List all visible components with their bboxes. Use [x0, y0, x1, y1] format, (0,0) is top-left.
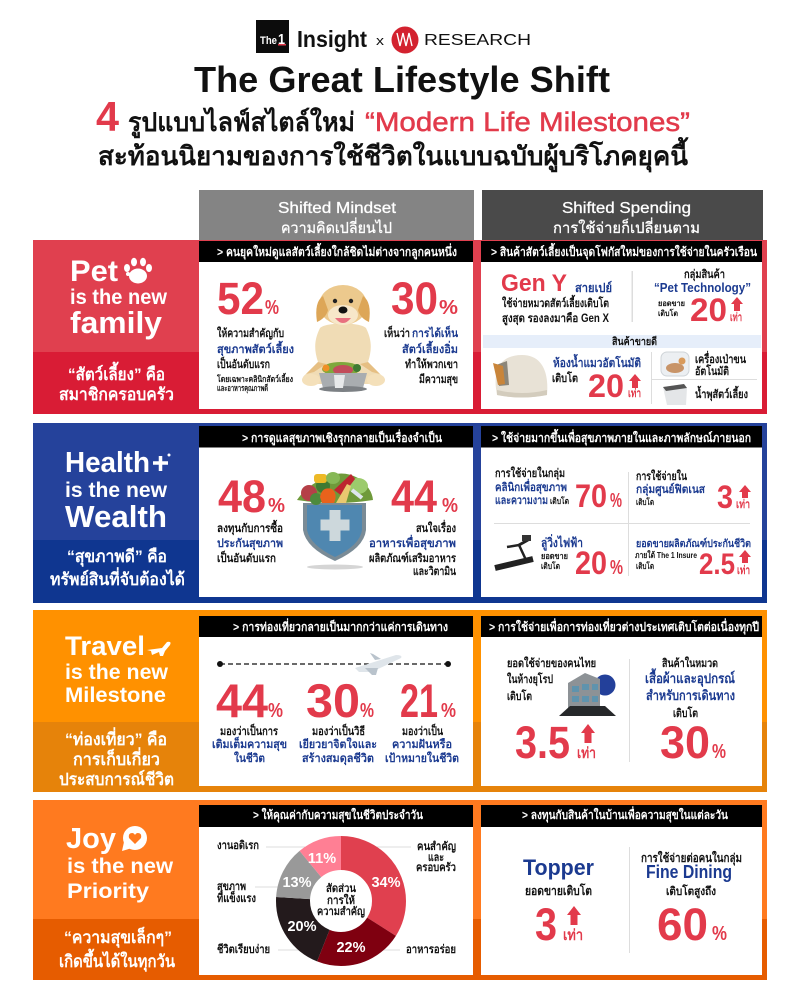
- topper stat: เท่า: [563, 927, 583, 944]
- topper stat: Topper: [523, 855, 594, 880]
- stat 44%: สนใจเรื่อง: [416, 519, 456, 535]
- panel: health spending: [481, 426, 762, 597]
- column head: shifted mindset: Shifted Mindset: [278, 200, 397, 217]
- pet caption: [59, 361, 174, 404]
- subtitle: “Modern Life Milestones”: [365, 107, 690, 137]
- fine dining stat: การใช้จ่ายต่อคนในกลุ่ม: [641, 850, 742, 866]
- automatic cat toilet stat: เติบโต: [552, 370, 578, 385]
- stat 30%: ทำให้พวกเขา: [405, 357, 458, 371]
- icon: dog: [302, 285, 385, 392]
- topper stat: [523, 855, 594, 950]
- joy heading: [66, 823, 174, 903]
- stat 52%: ให้ความสำคัญกับ: [217, 326, 284, 340]
- europe spending text: ยอดใช้จ่ายของคนไทย: [507, 656, 596, 670]
- panel: joy spending: [481, 805, 762, 975]
- donut labels: ที่แข็งแรง: [217, 889, 256, 905]
- stat 30% apparel: เติบโต: [673, 705, 698, 720]
- joy heading: is the new: [67, 855, 174, 878]
- pet technology stat: [654, 268, 751, 328]
- stat 30% apparel: %: [712, 741, 726, 763]
- stat 30%: เยียวยาจิตใจและ: [299, 737, 377, 751]
- stat 48%: ประกันสุขภาพ: [217, 537, 283, 551]
- europe spending text: ในห้างยุโรป: [507, 671, 553, 687]
- fine dining stat: %: [712, 923, 727, 945]
- treadmill stat: %: [610, 557, 623, 579]
- stat 44%: [212, 674, 287, 765]
- stat 52%: 52: [217, 273, 264, 324]
- stat 48%: เป็นอันดับแรก: [217, 550, 276, 565]
- column head: shifted spending: Shifted Spending: [562, 200, 691, 217]
- stat 52%: สุขภาพสัตว์เลี้ยง: [217, 340, 294, 357]
- automatic cat toilet stat: 20: [588, 368, 624, 404]
- column head: shifted mindset: [199, 190, 474, 242]
- panel: joy mindset: [199, 805, 473, 975]
- header logos: x: [376, 33, 385, 48]
- treadmill stat: 20: [575, 545, 607, 581]
- gen y text: ใช้จ่ายหมวดสัตว์เลี้ยงเติบโต: [502, 294, 609, 310]
- column head: shifted mindset: ความคิดเปลี่ยนไป: [281, 217, 392, 237]
- pet heading: is the new: [70, 286, 168, 309]
- pet heading: family: [70, 305, 163, 340]
- icon: paw: [124, 258, 152, 284]
- stat 30%: สัตว์เลี้ยงอิ่ม: [402, 340, 458, 356]
- panel: health mindset: > การดูแลสุขภาพเชิงรุกกลายเป็นเรื่องจำเป็น: [242, 429, 443, 446]
- subtitle: [96, 93, 690, 173]
- stat 21%: [385, 674, 459, 765]
- travel heading: Travel: [65, 631, 145, 661]
- stat 30%: เห็นว่า: [384, 325, 410, 340]
- stat 44%: %: [268, 700, 283, 722]
- topper stat: ยอดขายเติบโต: [525, 883, 592, 898]
- joy caption: เกิดขึ้นได้ในทุกวัน: [59, 948, 175, 972]
- health heading: is the new: [65, 479, 168, 502]
- pet heading: [70, 255, 168, 340]
- stat 30%: %: [360, 700, 374, 722]
- stat 30%: 30: [306, 674, 360, 727]
- header logos: RESEARCH: [424, 32, 531, 49]
- stat 52%: เป็นอันดับแรก: [217, 356, 270, 371]
- stat 21%: %: [441, 700, 456, 722]
- best sellers band: [483, 335, 761, 348]
- pet technology stat: “Pet Technology”: [654, 281, 751, 295]
- stat 30%: การได้เห็น: [412, 325, 458, 340]
- stat 52%: และอาหารคุณภาพดี: [217, 383, 268, 394]
- icon: department store: [559, 673, 616, 716]
- dryer label: เครื่องเป่าขน: [695, 350, 746, 366]
- fine dining stat: เติบโตสูงถึง: [666, 883, 716, 899]
- insurance stat: 2.5: [699, 548, 735, 581]
- donut labels: [217, 839, 456, 956]
- panel: health mindset: [199, 426, 473, 597]
- stat 21%: มองว่าเป็น: [402, 723, 443, 738]
- stat 48%: %: [268, 495, 285, 517]
- panel: pet row: [33, 240, 767, 414]
- donut labels: อาหารอร่อย: [406, 943, 456, 956]
- gen y text: สายเปย์: [575, 280, 612, 295]
- travel caption: ประสบการณ์ชีวิต: [59, 769, 174, 789]
- donut chart: [255, 847, 411, 956]
- donut chart: 11%: [308, 851, 336, 867]
- gen y text: Gen Y: [501, 270, 567, 297]
- fitness stat: เติบโต: [636, 497, 654, 507]
- stat 30% apparel: สินค้าในหมวด: [662, 656, 718, 670]
- stat 44%: 44: [391, 471, 437, 522]
- stat 44%: ในชีวิต: [234, 751, 265, 765]
- icon: health shield: [297, 472, 373, 570]
- treadmill stat: ยอดขาย: [541, 551, 568, 561]
- best sellers band: สินค้าขายดี: [611, 335, 657, 348]
- pet heading: Pet: [70, 255, 118, 288]
- pet technology stat: ยอดขาย: [658, 299, 685, 308]
- panel: travel spending: > การใช้จ่ายเพื่อการท่องเที่ยวต่างประเทศเติบโตต่อเนื่องทุกปี: [489, 618, 759, 635]
- insurance stat: ภายใต้ The 1 Insure: [635, 550, 697, 560]
- fine dining stat: [641, 850, 742, 950]
- stat 44%: 44: [216, 674, 268, 727]
- pet technology stat: เติบโต: [658, 308, 678, 318]
- clinic stat: และความงาม: [495, 495, 548, 507]
- gen y text: [501, 270, 612, 326]
- donut chart: 20%: [287, 919, 317, 935]
- stat 3.5x: 3.5: [515, 717, 570, 768]
- stat 30%: มองว่าเป็นวิธี: [312, 723, 365, 738]
- donut chart: ความสำคัญ: [317, 905, 365, 918]
- panel: pet mindset: > คนยุคใหม่ดูแลสัตว์เลี้ยงใกล้ชิดไม่ต่างจากลูกคนหนึ่ง: [217, 242, 457, 260]
- panel: joy spending: > ลงทุนกับสินค้าในบ้านเพื่อความสุขในแต่ละวัน: [522, 806, 729, 823]
- stat 44%: %: [442, 495, 458, 517]
- gen y text: สูงสุด รองลงมาคือ Gen X: [502, 312, 609, 326]
- stat 3.5x: เท่า: [577, 745, 596, 762]
- travel caption: การเก็บเกี่ยว: [73, 747, 160, 769]
- donut labels: และ: [428, 852, 444, 864]
- donut chart: 34%: [371, 875, 401, 891]
- title: The Great Lifestyle Shift: [194, 59, 610, 100]
- pet caption: สมาชิกครอบครัว: [59, 385, 174, 404]
- icon: pet water fountain: [663, 384, 687, 405]
- clinic stat: [495, 466, 622, 514]
- stat 30%: [384, 273, 458, 387]
- pet caption: “สัตว์เลี้ยง” คือ: [68, 361, 165, 384]
- donut labels: ชีวิตเรียบง่าย: [217, 943, 270, 956]
- stat 44%: อาหารเพื่อสุขภาพ: [369, 534, 456, 551]
- insurance stat: ยอดขายผลิตภัณฑ์ประกันชีวิต: [636, 537, 751, 550]
- stat 44%: เติมเต็มความสุข: [212, 736, 287, 752]
- stat 30%: สร้างสมดุลชีวิต: [302, 752, 374, 766]
- treadmill stat: ลู่วิ่งไฟฟ้า: [541, 534, 583, 551]
- pet technology stat: เท่า: [730, 311, 742, 324]
- joy heading: Priority: [67, 880, 149, 903]
- fine dining stat: 60: [657, 899, 708, 950]
- stat 44%: มองว่าเป็นการ: [220, 723, 279, 738]
- health heading: Wealth: [65, 499, 167, 534]
- fitness stat: เท่า: [736, 498, 750, 511]
- subtitle: รูปแบบไลฟ์สไตล์ใหม่: [128, 106, 355, 139]
- panel: health row: [33, 423, 767, 603]
- clinic stat: 70: [575, 478, 607, 514]
- stat 44%: [369, 471, 458, 578]
- clinic stat: %: [610, 490, 622, 512]
- stat 52%: [216, 273, 294, 394]
- treadmill stat: [541, 534, 623, 581]
- subtitle: สะท้อนนิยามของการใช้ชีวิตในแบบฉบับผู้บริโภคยุคนี้: [98, 136, 689, 173]
- health heading: Health: [65, 447, 150, 479]
- clinic stat: คลินิกเพื่อสุขภาพ: [495, 478, 567, 495]
- travel heading: Milestone: [65, 684, 166, 707]
- europe spending text: เติบโต: [507, 688, 532, 703]
- fitness stat: การใช้จ่ายใน: [636, 469, 687, 483]
- icon: heart bubble: [122, 826, 147, 851]
- insurance stat: เท่า: [737, 564, 750, 577]
- header logos: The: [260, 35, 277, 47]
- stat 21%: เป้าหมายในชีวิต: [385, 751, 459, 765]
- automatic cat toilet stat: เท่า: [628, 387, 641, 400]
- icon: treadmill: [495, 535, 533, 568]
- clinic stat: การใช้จ่ายในกลุ่ม: [495, 466, 565, 481]
- dryer label: [695, 350, 746, 378]
- health caption: ทรัพย์สินที่จับต้องได้: [50, 567, 185, 589]
- stat 44%: และวิตามิน: [413, 565, 456, 578]
- stat 30% apparel: [645, 656, 735, 768]
- travel caption: “ท่องเที่ยว” คือ: [65, 727, 167, 749]
- stat 52%: %: [265, 297, 279, 319]
- header logos: [256, 20, 531, 54]
- header logos: 1: [278, 31, 285, 48]
- panel: pet spending: [481, 241, 762, 409]
- donut chart: สัดส่วน: [326, 882, 356, 895]
- panel: travel mindset: > การท่องเที่ยวกลายเป็นมากกว่าแค่การเดินทาง: [233, 618, 448, 634]
- travel heading: [65, 631, 171, 707]
- automatic cat toilet stat: ห้องน้ำแมวอัตโนมัติ: [553, 353, 641, 370]
- donut labels: สุขภาพ: [217, 881, 246, 894]
- dryer label: อัตโนมัติ: [695, 363, 729, 378]
- joy caption: “ความสุขเล็กๆ”: [64, 925, 172, 948]
- panel: health spending: > ใช้จ่ายมากขึ้นเพื่อสุขภาพภายในและภาพลักษณ์ภายนอก: [492, 428, 751, 446]
- stat 48%: ลงทุนกับการซื้อ: [217, 519, 283, 536]
- stat 30%: %: [439, 297, 458, 319]
- fitness stat: [636, 469, 751, 515]
- stat 30% apparel: เสื้อผ้าและอุปกรณ์: [645, 668, 735, 687]
- fitness stat: กลุ่มศูนย์ฟิตเนส: [636, 482, 706, 497]
- health heading: [65, 447, 170, 534]
- column head: shifted spending: [482, 190, 763, 242]
- panel: joy mindset: > ให้คุณค่ากับความสุขในชีวิตประจำวัน: [253, 807, 424, 823]
- europe spending text: [507, 656, 596, 703]
- stat 30%: 30: [391, 273, 438, 324]
- icon: pet dryer: [661, 352, 689, 376]
- automatic cat toilet stat: [552, 353, 641, 404]
- stat 30%: [299, 674, 377, 766]
- stat 52%: โดยเฉพาะคลินิกสัตว์เลี้ยง: [216, 372, 293, 384]
- pet technology stat: 20: [690, 292, 727, 328]
- pet technology stat: กลุ่มสินค้า: [684, 268, 725, 282]
- insurance stat: [635, 537, 751, 581]
- panel: pet spending: > สินค้าสัตว์เลี้ยงเป็นจุดโฟกัสใหม่ของการใช้จ่ายในครัวเรือน: [491, 242, 758, 260]
- column head: shifted spending: การใช้จ่ายก็เปลี่ยนตาม: [553, 217, 700, 237]
- health caption: “สุขภาพดี” คือ: [67, 546, 167, 567]
- travel caption: [59, 727, 174, 789]
- route line with plane: [217, 653, 451, 675]
- donut chart: 13%: [282, 875, 312, 891]
- donut chart: การให้: [327, 893, 355, 907]
- insurance stat: เติบโต: [636, 561, 654, 571]
- panel: joy row: [33, 800, 767, 980]
- panel: travel mindset: [199, 616, 473, 786]
- fine dining stat: Fine Dining: [646, 861, 732, 882]
- header logos: Insight: [297, 26, 367, 52]
- joy caption: [59, 925, 175, 972]
- clinic stat: เติบโต: [550, 496, 569, 506]
- fountain label: น้ำพุสัตว์เลี้ยง: [695, 385, 748, 402]
- stat 44%: ผลิตภัณฑ์เสริมอาหาร: [369, 551, 457, 565]
- donut labels: งานอดิเรก: [217, 839, 259, 852]
- donut chart: 22%: [336, 940, 366, 956]
- joy heading: Joy: [66, 823, 116, 855]
- donut labels: ครอบครัว: [416, 861, 456, 874]
- stat 30%: มีความสุข: [419, 373, 458, 387]
- panel: pet mindset: [199, 241, 473, 409]
- fitness stat: 3: [717, 479, 733, 515]
- stat 30% apparel: สำหรับการเดินทาง: [646, 688, 735, 703]
- donut labels: คนสำคัญ: [417, 839, 456, 853]
- travel heading: is the new: [65, 661, 169, 684]
- stat 21%: 21: [400, 674, 438, 727]
- subtitle: 4: [96, 93, 120, 140]
- stat 30% apparel: 30: [660, 717, 710, 768]
- stat 48%: 48: [218, 471, 266, 522]
- stat 48%: [217, 471, 285, 565]
- topper stat: 3: [535, 899, 557, 950]
- treadmill stat: เติบโต: [541, 561, 560, 571]
- health caption: [50, 546, 185, 589]
- stat 21%: ความฝันหรือ: [392, 738, 452, 751]
- panel: travel row: [33, 610, 767, 792]
- icon: cat litter box: [493, 355, 547, 398]
- panel: travel spending: [481, 616, 762, 786]
